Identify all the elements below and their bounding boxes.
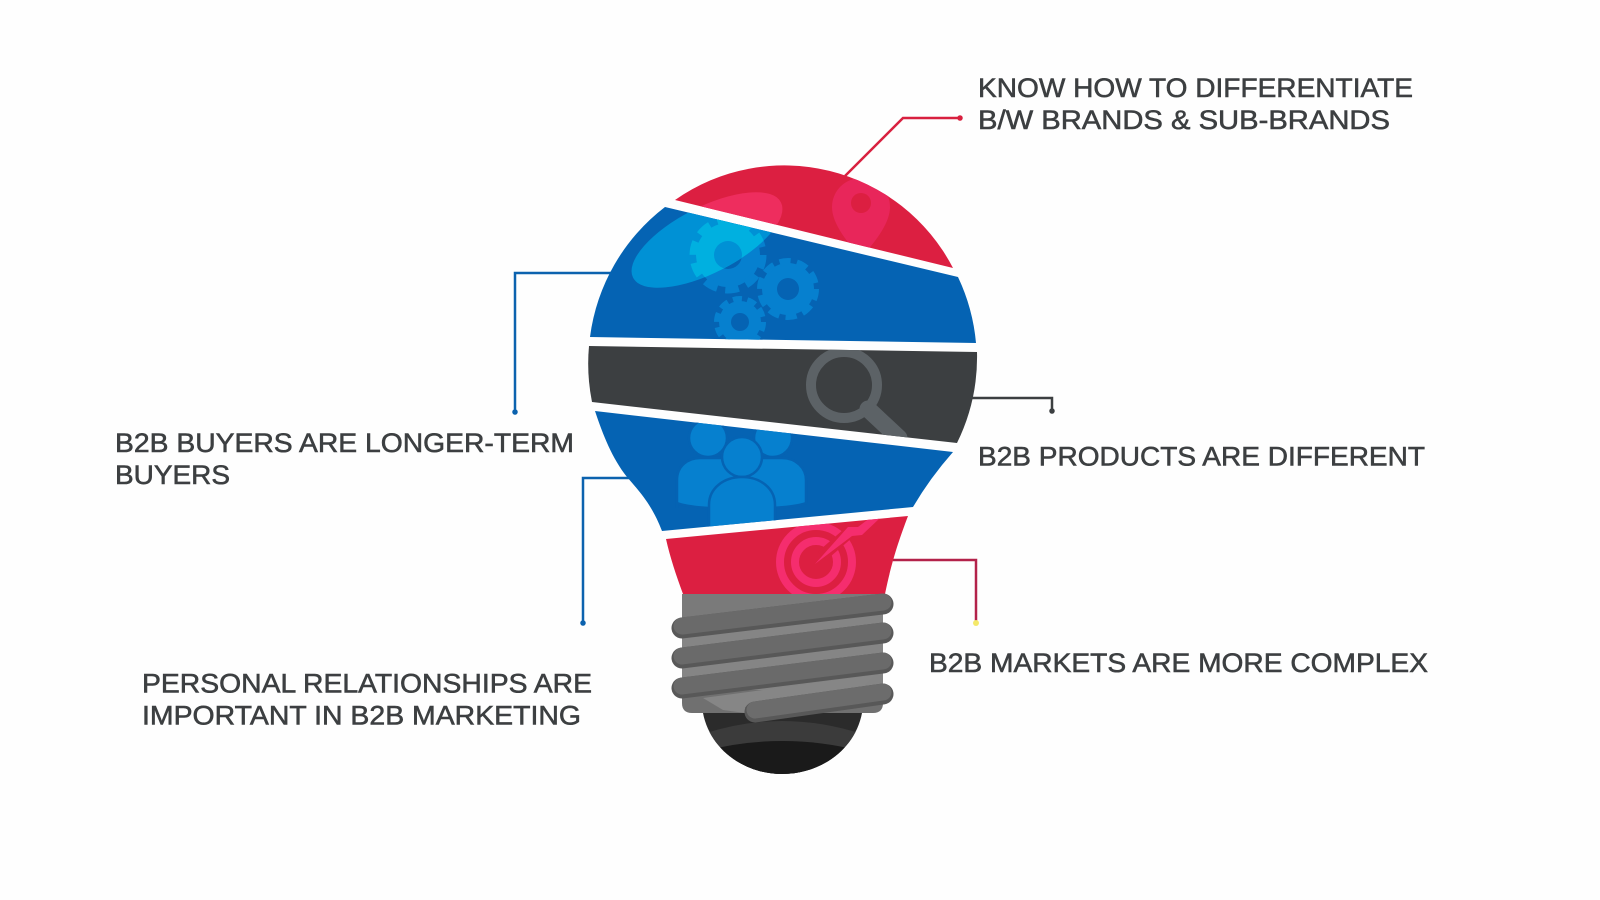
bulb segment: lower red with target bbox=[666, 514, 908, 598]
leader line: brands bbox=[845, 116, 962, 176]
label: longer-term buyers: B2B BUYERS ARE LONGER-TERM bbox=[115, 428, 574, 458]
label: longer-term buyers bbox=[115, 428, 574, 490]
bulb segment: dark band with magnifier bbox=[588, 346, 977, 443]
label: longer-term buyers: BUYERS bbox=[115, 460, 230, 490]
label: products: B2B PRODUCTS ARE DIFFERENT bbox=[978, 442, 1425, 472]
label: relationships bbox=[142, 668, 592, 730]
label: markets: B2B MARKETS ARE MORE COMPLEX bbox=[929, 648, 1428, 678]
icon: people bbox=[677, 419, 806, 530]
leader line: relationships bbox=[582, 478, 630, 624]
bulb segment: upper blue with gears bbox=[590, 207, 976, 343]
thread rings bbox=[682, 602, 883, 688]
label: relationships: IMPORTANT IN B2B MARKETING bbox=[142, 700, 581, 730]
icon: magnifier bbox=[811, 352, 899, 438]
icon: gears bbox=[694, 221, 816, 345]
label: brands bbox=[978, 73, 1413, 135]
leader line: longer-term buyers bbox=[514, 273, 612, 414]
bulb segment: lower blue with people bbox=[595, 411, 953, 531]
label: relationships: PERSONAL RELATIONSHIPS ARE bbox=[142, 668, 592, 698]
bulb segment: top red with pin bbox=[675, 165, 953, 268]
cap bbox=[700, 713, 865, 775]
icon: map pin bbox=[832, 178, 890, 248]
label: brands: KNOW HOW TO DIFFERENTIATE bbox=[978, 73, 1413, 103]
final thread bbox=[755, 692, 883, 712]
bulb screw base bbox=[682, 594, 883, 775]
leader line: markets bbox=[893, 560, 979, 626]
infographic canvas bbox=[117, 78, 1428, 774]
icon: target bbox=[780, 514, 880, 598]
leader line: products bbox=[972, 398, 1054, 412]
label: brands: B/W BRANDS & SUB-BRANDS bbox=[978, 105, 1390, 135]
